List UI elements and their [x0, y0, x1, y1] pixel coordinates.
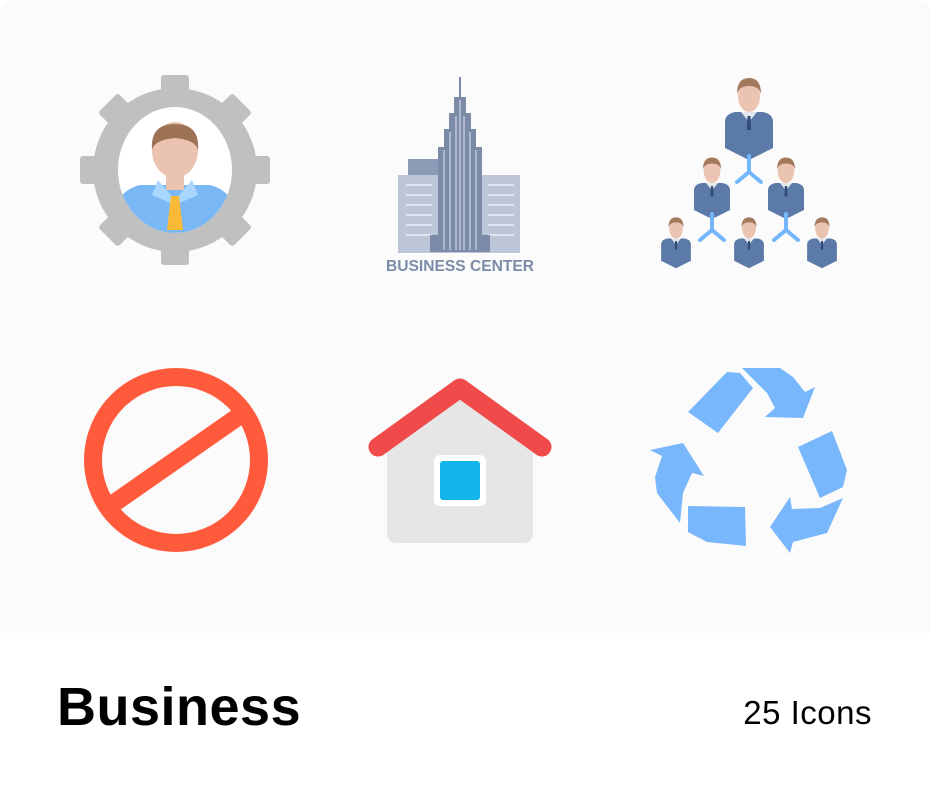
title: Business	[57, 677, 301, 737]
label: business center: BUSINESS CENTER	[386, 258, 534, 275]
icon: business center building	[386, 77, 534, 275]
icon: recycle	[650, 368, 847, 553]
icon: prohibited sign	[93, 377, 259, 543]
icon: hierarchy team	[661, 78, 837, 268]
icon panel	[80, 75, 847, 553]
icon count: 25 Icons	[743, 694, 872, 731]
icon: gear with person	[80, 75, 270, 265]
icon: house	[378, 388, 542, 543]
